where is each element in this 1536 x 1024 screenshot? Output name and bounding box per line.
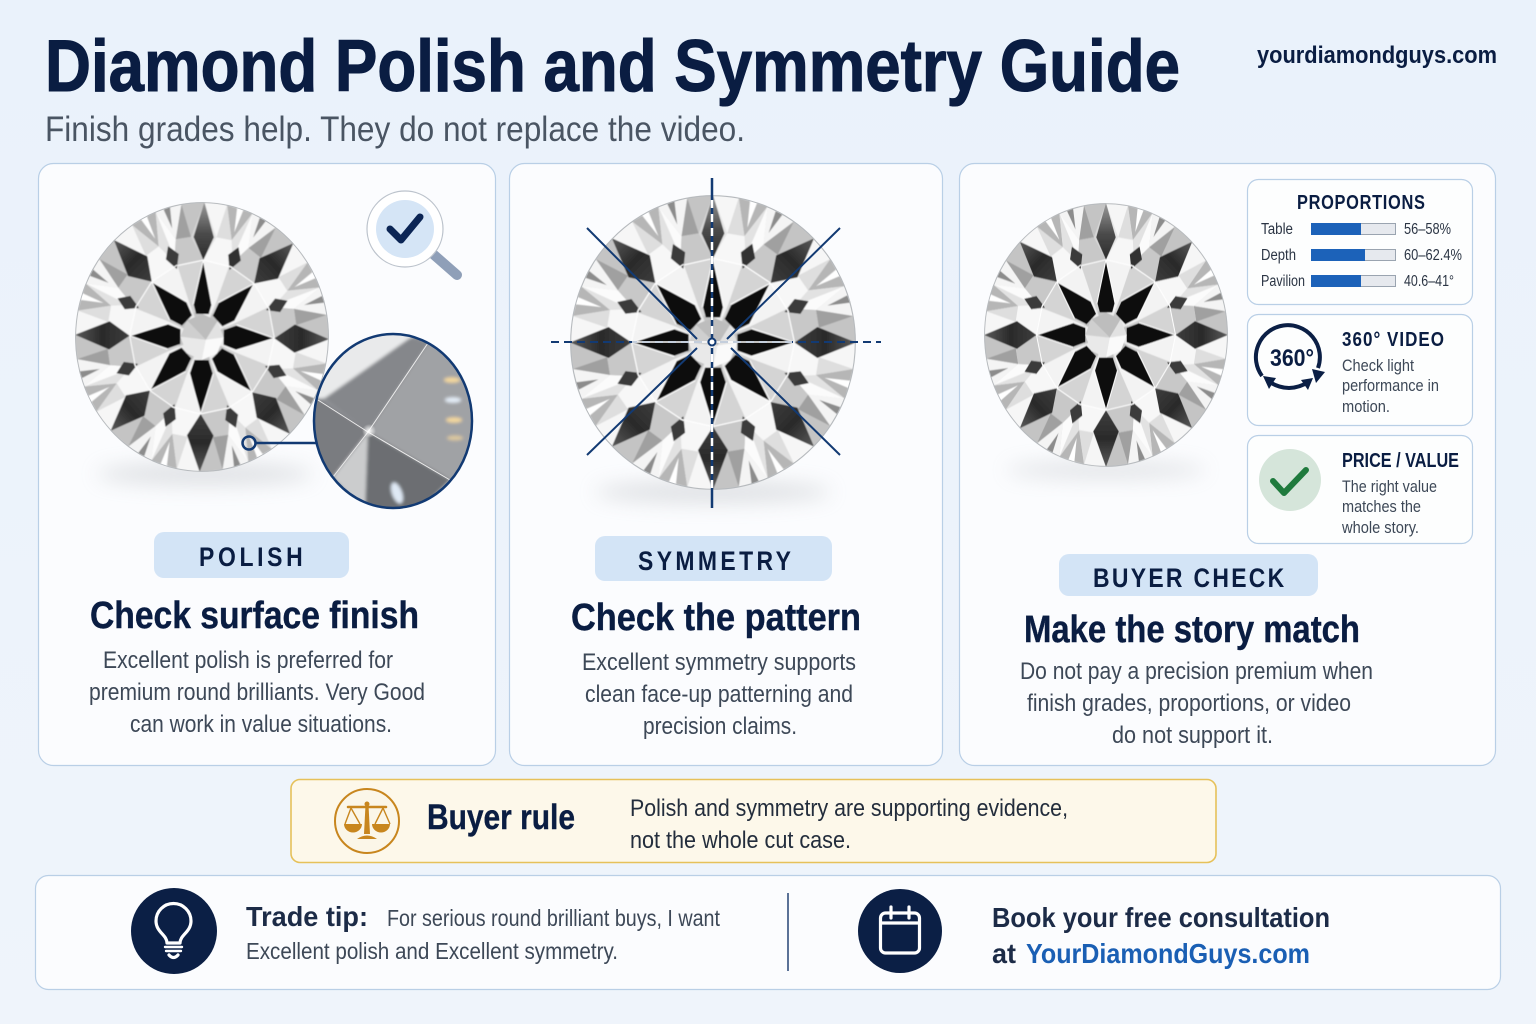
text: symmetry description: Excellent symmetry supports: [582, 649, 856, 676]
text: buyer check description: do not support it.: [1112, 722, 1273, 749]
card: 360 video: performance in: [1342, 377, 1439, 395]
heading: make the story match: Make the story match: [1024, 609, 1360, 651]
row: depth: [1261, 247, 1462, 264]
panel: buyer check: [960, 164, 1496, 766]
text: buyer check description: Do not pay a precision premium when: [1020, 658, 1373, 685]
badge: polish: POLISH: [199, 542, 303, 572]
heading: buyer rule: Buyer rule: [427, 798, 575, 837]
icon: light bulb: [131, 888, 217, 974]
badge: buyer check: [1059, 554, 1318, 596]
text: symmetry description: precision claims.: [643, 713, 797, 740]
panel: polish: [38, 164, 496, 766]
icon: scales: [335, 789, 399, 853]
icon: green check: [1259, 449, 1321, 511]
badge: buyer check: BUYER CHECK: [1093, 563, 1284, 593]
row: table: [1261, 221, 1451, 238]
text: buyer check description: [1020, 658, 1373, 749]
panel: buyer rule: [291, 780, 1216, 862]
panel: symmetry: [510, 164, 942, 766]
text: polish description: [89, 647, 425, 738]
row: depth: Depth: [1261, 247, 1296, 264]
card: price value: The right value: [1342, 478, 1437, 496]
row: depth: 60–62.4%: [1404, 247, 1462, 264]
icon: magnifier check: [367, 191, 457, 275]
text: polish description: premium round brilliants. Very Good: [89, 679, 425, 706]
card: 360 video: 360° VIDEO: [1342, 328, 1444, 350]
diamond: polish: [70, 197, 334, 485]
card: proportions: PROPORTIONS: [1297, 190, 1425, 213]
text: consultation call to action: [992, 902, 1330, 969]
text: trade tip: Excellent polish and Excellent symmetry.: [246, 938, 618, 964]
text: polish description: Excellent polish is preferred for: [103, 647, 393, 674]
text: buyer rule description: [630, 795, 1068, 854]
heading: check surface finish: Check surface finish: [90, 595, 419, 637]
card: price value: whole story.: [1341, 519, 1419, 537]
diamond: symmetry with axes: [551, 178, 881, 508]
diamond: buyer check: [982, 200, 1230, 479]
row: pavilion: Pavilion: [1261, 273, 1305, 290]
text: polish description: can work in value situations.: [130, 711, 392, 738]
icon: calendar: [858, 889, 942, 973]
heading: check the pattern: Check the pattern: [571, 597, 861, 639]
card: 360 video: motion.: [1342, 398, 1390, 416]
badge: symmetry: [595, 536, 832, 581]
card: proportions: [1248, 180, 1472, 304]
text: trade tip: Trade tip:: [246, 901, 368, 932]
row: pavilion: [1261, 273, 1454, 290]
website label: yourdiamondguys.com: [1257, 42, 1497, 69]
subtitle: Finish grades help. They do not replace the video.: [45, 110, 745, 149]
text: trade tip: [246, 901, 721, 964]
icon: 360 rotation: [1256, 325, 1325, 390]
row: pavilion: 40.6–41°: [1404, 273, 1454, 290]
text: symmetry description: clean face-up patterning and: [585, 681, 853, 708]
text: symmetry description: [582, 649, 856, 740]
card: 360 video: [1248, 314, 1472, 426]
card: price value: PRICE / VALUE: [1342, 450, 1459, 472]
title: Diamond Polish and Symmetry Guide: [45, 26, 1180, 107]
badge: symmetry: SYMMETRY: [638, 546, 791, 576]
text: consultation call to action: at: [992, 938, 1016, 969]
text: consultation call to action: YourDiamondGuys.com: [1026, 938, 1310, 969]
callout: surface zoom lens: [242, 325, 480, 515]
row: table: Table: [1261, 221, 1293, 238]
text: trade tip: For serious round brilliant buys, I want: [387, 905, 721, 931]
text: buyer rule description: not the whole cut case.: [630, 827, 851, 854]
card: 360 video: Check light: [1342, 357, 1414, 375]
card: price value: [1248, 436, 1472, 544]
row: table: 56–58%: [1404, 221, 1451, 238]
card: price value: matches the: [1342, 498, 1421, 516]
text: buyer rule description: Polish and symmetry are supporting evidence,: [630, 795, 1068, 822]
text: buyer check description: finish grades, proportions, or video: [1027, 690, 1351, 717]
text: consultation call to action: Book your free consultation: [992, 902, 1330, 933]
icon: 360 rotation: 360°: [1270, 345, 1314, 372]
badge: polish: [154, 532, 349, 578]
panel: trade tip and consultation: [36, 876, 1500, 990]
